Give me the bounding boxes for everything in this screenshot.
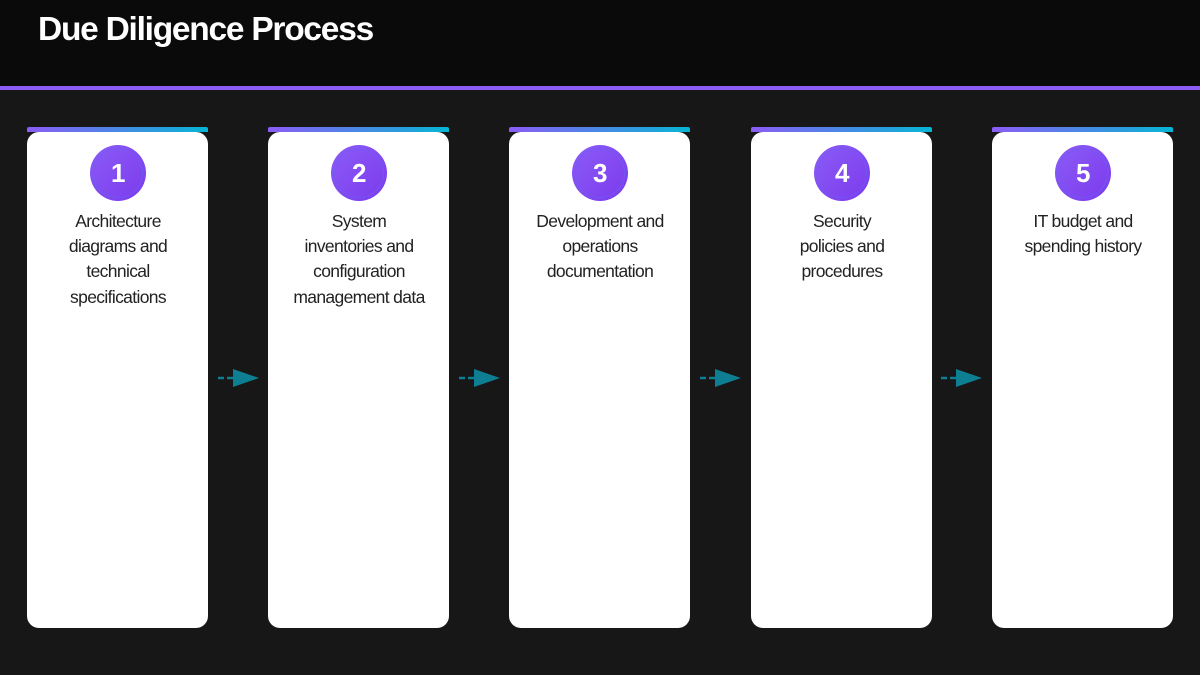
step 2 number badge: 2 xyxy=(352,158,366,188)
step 5 text xyxy=(1024,211,1142,256)
step 5 number badge: 5 xyxy=(1076,158,1090,188)
step 1 text: specifications xyxy=(70,287,166,307)
step 2 text: configuration xyxy=(313,261,405,281)
panel: step 5 xyxy=(992,127,1173,628)
header accent line xyxy=(0,86,1200,90)
step 5 number badge xyxy=(1054,145,1110,201)
step 3 text: documentation xyxy=(547,261,653,281)
panel: step 4 xyxy=(751,127,932,628)
panel: step 1 xyxy=(27,127,208,628)
step 4 text: procedures xyxy=(801,261,883,281)
step 4 text: Security xyxy=(813,211,871,231)
step 5 text: spending history xyxy=(1024,236,1142,256)
arrow: step 1 to 2 xyxy=(218,369,259,387)
step 3 text xyxy=(536,211,664,281)
step 2 text: System xyxy=(332,211,386,231)
panel: step 3 xyxy=(509,127,690,628)
title: Due Diligence Process xyxy=(38,11,373,48)
header band xyxy=(0,0,1200,86)
step 4 number badge xyxy=(814,145,870,201)
step 1 number badge: 1 xyxy=(111,158,125,188)
arrow: step 3 to 4 xyxy=(700,369,741,387)
step 2 number badge xyxy=(330,145,386,201)
step 3 text: operations xyxy=(562,236,638,256)
step 2 text xyxy=(293,211,426,307)
step 2 text: management data xyxy=(293,287,425,307)
step 3 number badge: 3 xyxy=(593,158,607,188)
arrow: step 2 to 3 xyxy=(459,369,500,387)
step 2 text: inventories and xyxy=(305,236,413,256)
step 5 text: IT budget and xyxy=(1033,211,1133,231)
step 3 number badge xyxy=(572,145,628,201)
step 1 text: Architecture xyxy=(75,211,161,231)
step 1 number badge xyxy=(90,145,146,201)
step 1 text xyxy=(69,211,167,307)
step 1 text: technical xyxy=(86,261,150,281)
step 4 number badge: 4 xyxy=(835,158,849,188)
step 3 text: Development and xyxy=(536,211,664,231)
panel: step 2 xyxy=(268,127,449,628)
step 4 text: policies and xyxy=(800,236,884,256)
arrow: step 4 to 5 xyxy=(941,369,982,387)
step 4 text xyxy=(800,211,884,281)
step 1 text: diagrams and xyxy=(69,236,167,256)
